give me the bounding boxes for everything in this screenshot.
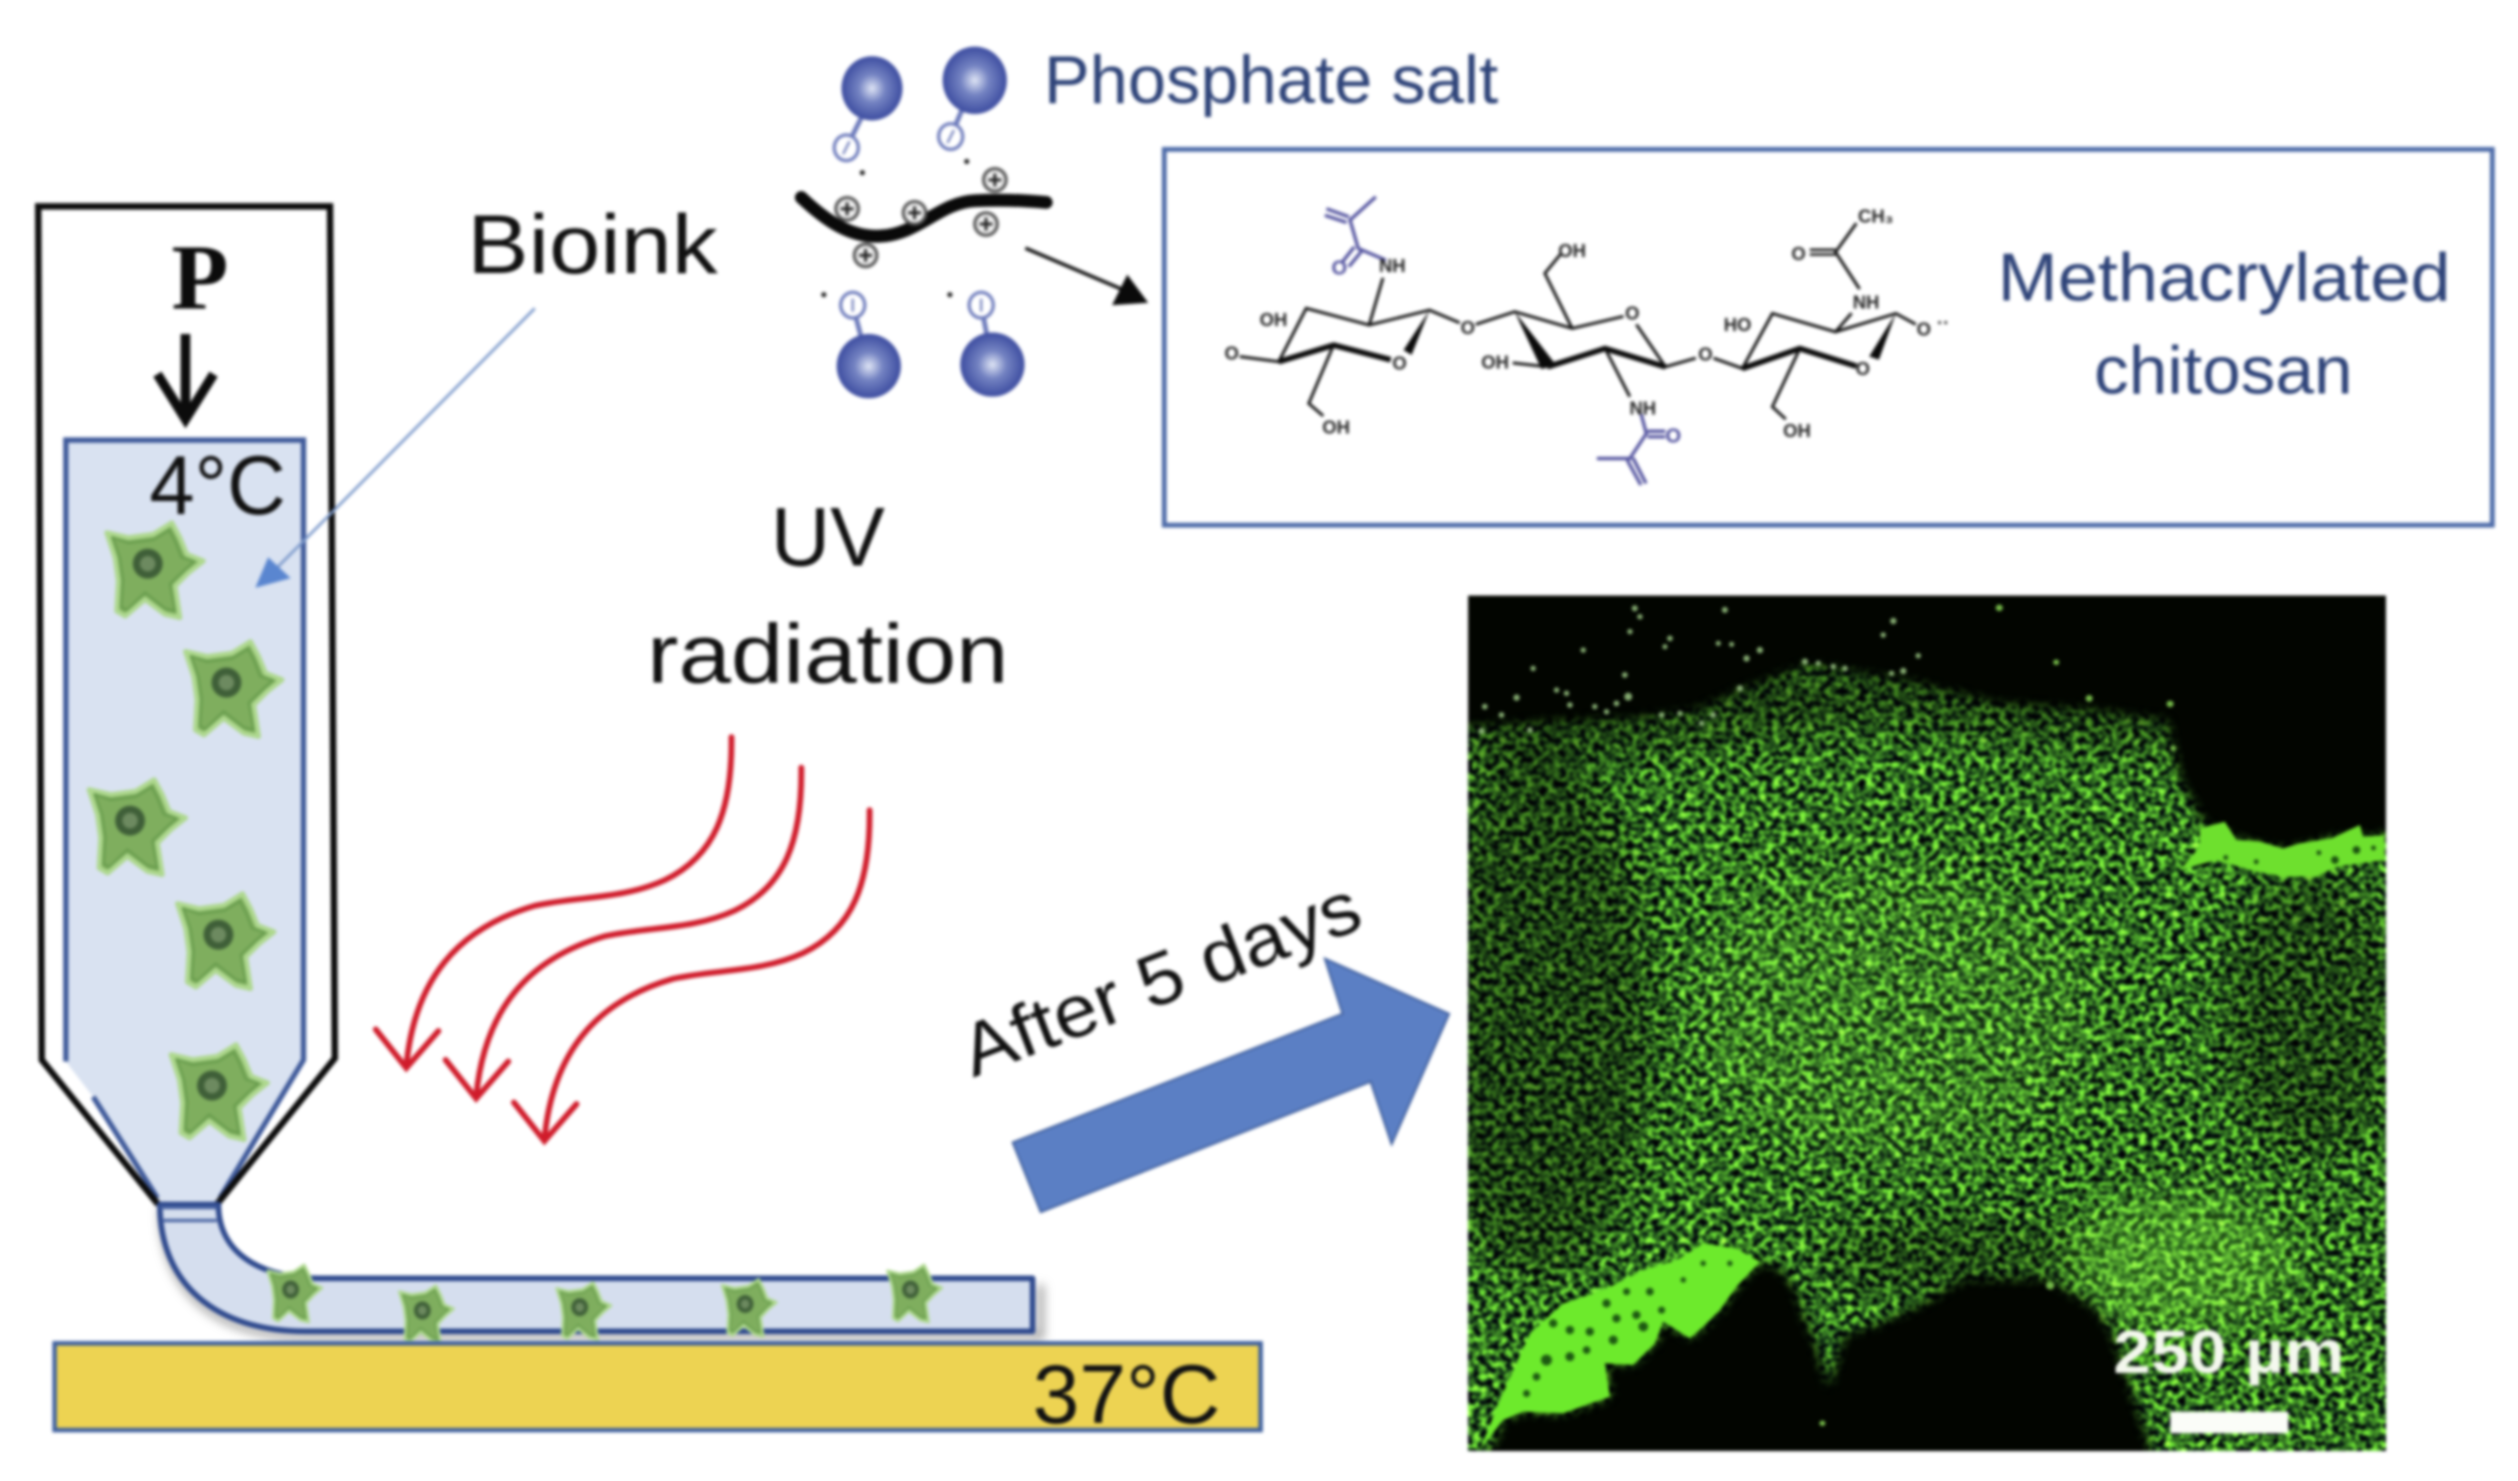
black atom labels: NH (1379, 255, 1406, 276)
bright glow lower right (2065, 1195, 2293, 1329)
darker left side (1424, 746, 1652, 1279)
black atom labels: O (1392, 352, 1407, 373)
syringe outer wall (38, 206, 335, 1204)
black atom labels: OH (1783, 420, 1811, 441)
black atom labels: O (1625, 303, 1640, 324)
Phosphate salt label: Phosphate salt (1044, 43, 1499, 118)
cell 5 (171, 1045, 268, 1140)
tube shadow (162, 1208, 1041, 1336)
negative charge marks (843, 130, 981, 312)
positive charges (836, 169, 1006, 267)
chemical structure of methacrylated chitosan (1225, 197, 1949, 485)
black atom labels: O (1791, 243, 1806, 264)
UV red arrows (376, 737, 870, 1141)
UV radiation label (647, 489, 1008, 701)
bright band upper right (2180, 822, 2385, 877)
nozzle band (161, 1208, 217, 1220)
phosphate ball bottom left (837, 334, 901, 398)
black atom labels: CH₃ (1858, 205, 1893, 226)
tube cell 2 (399, 1286, 453, 1343)
black atom labels: O (1856, 358, 1870, 379)
green tissue (1466, 660, 2388, 1454)
37°C label: 37°C (1033, 1347, 1220, 1441)
scale bar label: 250 µm (2113, 1318, 2345, 1386)
UV radiation label: radiation (647, 607, 1008, 701)
fluorescence micrograph (1424, 596, 2401, 1451)
blue oxygen labels: O (1331, 258, 1347, 280)
scale bar (2170, 1412, 2288, 1433)
Methacrylated chitosan label: Methacrylated (1998, 240, 2451, 315)
pressure label P: P (171, 226, 228, 329)
Methacrylated chitosan label: chitosan (2094, 333, 2353, 408)
black background (1468, 596, 2386, 1451)
Methacrylated chitosan label (1998, 240, 2451, 408)
After 5 days label: After 5 days (949, 864, 1372, 1093)
chitosan polymer chain (801, 198, 1046, 236)
bright glow centre (1694, 868, 2089, 1157)
black atom labels: NH (1629, 397, 1656, 418)
black atom labels: O (1461, 317, 1475, 338)
UV arrow 3 (514, 810, 870, 1141)
darker right side (2221, 868, 2401, 1157)
extruded tube (160, 1204, 1033, 1331)
Bioink label: Bioink (467, 197, 718, 291)
top fading edge (1460, 662, 2209, 768)
carbonyl bonds black (1810, 250, 1836, 255)
negative charges (834, 124, 993, 318)
black atom labels: O (1917, 319, 1931, 340)
thick front bonds and wedges (1279, 345, 1856, 368)
phosphate stems (846, 84, 992, 366)
darker lower centre (1819, 1218, 2083, 1295)
stereo wedges (1404, 310, 1896, 369)
black atom labels: O (1225, 343, 1239, 364)
UV arrow 2 (446, 768, 801, 1098)
phosphate ball bottom right (960, 332, 1025, 397)
UV radiation label: UV (771, 489, 885, 583)
black atom labels: NH (1853, 291, 1879, 312)
scattered cells right and bottom (1819, 604, 2176, 1426)
arrow from polymer to structure (1025, 248, 1148, 305)
black atom labels: OH (1558, 240, 1586, 261)
bioink fill in barrel (66, 440, 304, 1201)
black atom labels: OH (1322, 417, 1350, 438)
dark holes in upper band (2223, 846, 2376, 864)
4°C label: 4°C (149, 438, 286, 532)
black atom labels: OH (1481, 352, 1509, 373)
tube cell 4 (722, 1279, 776, 1336)
pressure arrow (157, 334, 214, 419)
blue oxygen labels: O (1666, 425, 1681, 447)
bioink outline (66, 440, 304, 1198)
blue methacryl groups (1325, 197, 1665, 485)
methacrylated chitosan box (1164, 149, 2492, 525)
printed tube with cells (160, 1204, 1041, 1343)
phosphate ball top right (943, 47, 1007, 114)
UV arrow 1 (376, 737, 731, 1068)
cell 3 (89, 780, 186, 875)
blue oxygen labels (1331, 258, 1681, 447)
cell 1 (107, 523, 203, 618)
scattered cells above tissue (1478, 605, 1921, 734)
micrograph texture in image coordinates (1424, 596, 2401, 1451)
black atom labels (1225, 205, 1949, 441)
Bioink pointer arrow (255, 308, 535, 588)
tube cell 1 (268, 1265, 322, 1322)
dark holes in bright band (1523, 1261, 1733, 1397)
phosphate and chitosan polymer diagram (801, 47, 1046, 398)
heated plate (55, 1343, 1261, 1430)
tube cell 5 (888, 1265, 942, 1322)
black skeleton bonds (1240, 223, 1916, 419)
cell 4 (177, 894, 274, 989)
cell 2 (185, 642, 282, 736)
black atom labels: OH (1260, 309, 1287, 330)
syringe: barrel with bioink and cells (38, 206, 335, 1204)
tube cell 3 (557, 1283, 611, 1340)
charge dots (821, 159, 969, 297)
black atom labels: HO (1724, 314, 1751, 335)
black atom labels: ·· (1937, 312, 1949, 333)
big blue arrow (1013, 959, 1449, 1212)
bright band lower left (1480, 1243, 1760, 1450)
black atom labels: O (1698, 344, 1713, 365)
phosphate ball top left (841, 56, 902, 120)
plus signs (841, 173, 1001, 262)
